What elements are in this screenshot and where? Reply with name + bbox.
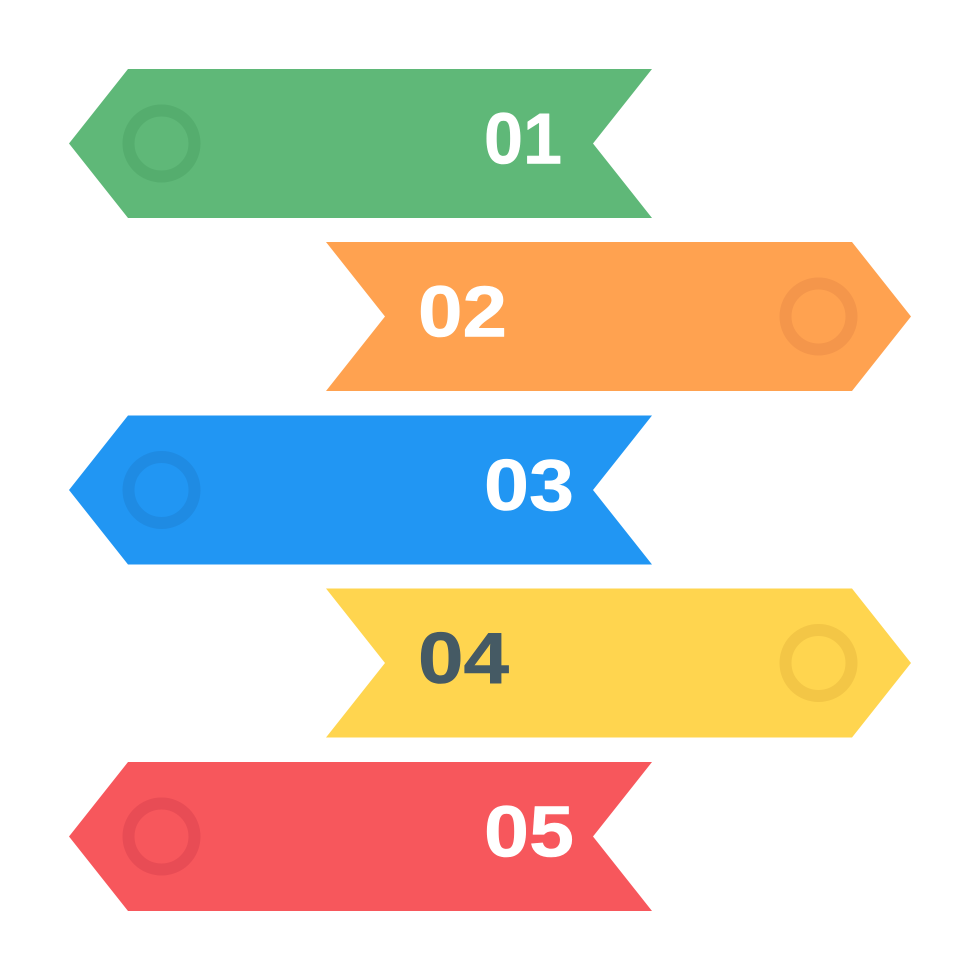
- icon: ring 02: [786, 284, 852, 350]
- icon: ring 03: [128, 457, 194, 523]
- banner shape 05: [69, 762, 652, 911]
- banner shape 01: [69, 69, 652, 218]
- banner 02: orange, pointing right: [326, 242, 911, 391]
- number 05: 05: [484, 792, 574, 872]
- banner shape 04: [326, 588, 911, 738]
- banner shape 03: [69, 416, 652, 564]
- icon: ring 04: [786, 630, 852, 696]
- banner shape 02: [326, 242, 911, 391]
- number 04: 04: [418, 619, 509, 699]
- icon: ring 01: [128, 110, 194, 176]
- number 03: 03: [484, 446, 574, 526]
- banner 01: green, pointing left: [69, 69, 652, 218]
- number 02: 02: [418, 272, 507, 352]
- banner 03: blue, pointing left: [69, 416, 652, 564]
- banner 05: red, pointing left: [69, 762, 652, 911]
- icon: ring 05: [128, 804, 194, 870]
- number 01: 01: [484, 100, 562, 180]
- banner 04: yellow, pointing right: [326, 588, 911, 738]
